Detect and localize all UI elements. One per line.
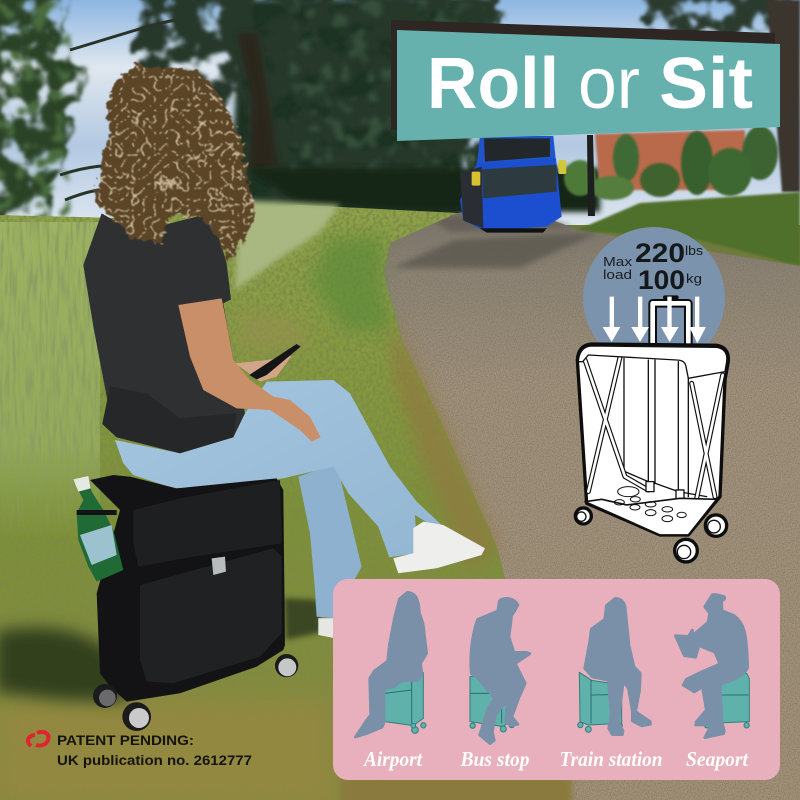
patent notice: [28, 732, 252, 768]
tree trunk, right: [767, 0, 800, 192]
black suitcase: [73, 475, 298, 731]
shirt fold shadow: [102, 387, 237, 453]
trees: [0, 0, 790, 240]
label: bus stop: Bus stop: [460, 747, 530, 771]
shrubs: [564, 126, 778, 200]
suitcase body: [90, 475, 285, 702]
scene: airport: [355, 592, 427, 737]
mown strip: [310, 236, 392, 330]
hand: [235, 356, 292, 382]
cross braces: [585, 357, 723, 530]
leg, back: [298, 463, 362, 618]
jeans: [115, 380, 442, 557]
wheels: [93, 654, 298, 731]
title text: Sit: [659, 44, 753, 124]
scene: bus stop: [470, 598, 530, 744]
top bar: [578, 346, 727, 378]
upper pocket: [133, 480, 282, 567]
t-shirt: [83, 213, 245, 453]
label: airport: Airport: [362, 747, 423, 771]
load arrows: [603, 297, 706, 343]
max load label: Max: [603, 254, 633, 269]
silhouette: [585, 598, 650, 735]
floor holes: [614, 487, 686, 522]
max load label: load: [603, 267, 632, 282]
shoe, back: [318, 618, 335, 638]
dry ground under panel: [340, 778, 572, 800]
dense woodland: [230, 0, 490, 215]
220 lbs: 220: [635, 238, 685, 268]
wheels: [575, 508, 727, 562]
220 lbs: lbs: [685, 243, 704, 258]
suitcase: [384, 673, 426, 733]
frame body: [577, 344, 728, 535]
hair: [93, 62, 252, 257]
max load circle: [583, 227, 725, 369]
shadow by suitcase: [284, 598, 322, 640]
title banner: [391, 20, 780, 141]
banner panel: [397, 30, 780, 141]
worn patch: [240, 310, 310, 350]
shoe, front: [393, 522, 485, 573]
road shadow bands: [392, 232, 600, 268]
person sitting on suitcase: [83, 213, 485, 638]
title text: Roll: [427, 44, 559, 124]
suitcase: [704, 672, 749, 728]
label: seaport: Seaport: [686, 747, 749, 771]
scene: seaport: [675, 594, 749, 738]
banner shadow: [391, 20, 775, 130]
suitcase frame diagram: [575, 297, 728, 562]
title text: or: [578, 44, 640, 124]
suitcase: [470, 672, 514, 732]
patent text: PATENT PENDING:: [57, 732, 194, 748]
house: [595, 130, 745, 190]
lower pocket: [140, 548, 282, 683]
label: train station: Train station: [560, 747, 662, 771]
centre rails: [624, 358, 688, 497]
dry verge: [390, 320, 498, 572]
dry ground bottom: [0, 700, 340, 800]
base plate: [585, 498, 717, 535]
lamp post: [587, 135, 595, 216]
100 kg: kg: [686, 271, 702, 286]
tall grass left: [0, 222, 100, 540]
shadow on grass: [0, 627, 130, 702]
bottle: [73, 476, 123, 582]
back floor: [625, 472, 707, 497]
road: [383, 211, 800, 800]
silhouette: [355, 592, 427, 737]
silhouette: [471, 598, 530, 744]
bus: [460, 136, 566, 233]
arm: [178, 298, 321, 442]
tree branches: [60, 20, 175, 200]
dark woodland base: [245, 168, 600, 212]
phone: [249, 344, 301, 379]
tall grass behind figure: [235, 200, 340, 290]
pink usage panel: [333, 579, 780, 780]
zipper pulls: [212, 557, 226, 575]
suitcase: [578, 672, 622, 732]
sky: [0, 0, 800, 225]
brackets: [646, 482, 684, 500]
tree trunk, centre: [237, 33, 278, 170]
100 kg: 100: [638, 265, 685, 295]
silhouette: [675, 594, 748, 738]
grass field: [0, 205, 568, 800]
scene: train station: [578, 598, 650, 735]
patent text: UK publication no. 2612777: [57, 752, 252, 768]
telescopic handle: [653, 297, 688, 348]
patent logo: [28, 732, 48, 746]
right lawn: [577, 192, 800, 266]
